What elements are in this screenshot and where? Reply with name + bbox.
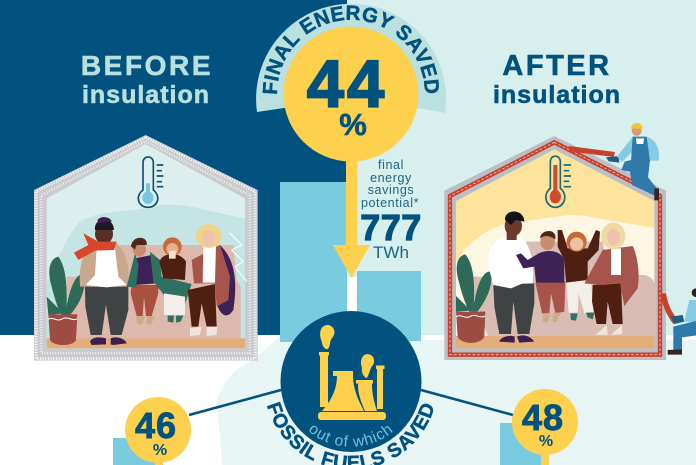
icon: thermometer warm bbox=[546, 156, 571, 207]
plant in pot bbox=[47, 257, 85, 345]
woman with a shawl bbox=[188, 224, 247, 336]
sofa bbox=[67, 245, 241, 338]
arrow from final energy saved to fossil fuels bbox=[333, 150, 370, 278]
caption: savings bbox=[368, 183, 414, 197]
badge: 48% bbox=[512, 389, 578, 465]
caption bbox=[361, 158, 419, 210]
icon: power plant bbox=[318, 325, 386, 420]
yellow circle bbox=[284, 26, 418, 162]
room backdrop bbox=[47, 205, 245, 338]
floor bbox=[456, 336, 654, 348]
heading: before insulation: BEFORE bbox=[81, 50, 213, 81]
badge: 46%: % bbox=[153, 442, 167, 459]
value 777: 777 bbox=[360, 207, 422, 248]
heading: after insulation bbox=[493, 50, 621, 109]
unit: TWh bbox=[373, 243, 409, 262]
smiling man bbox=[488, 211, 534, 343]
arc title: FINAL ENERGY SAVED bbox=[262, 5, 439, 94]
caption: potential* bbox=[361, 196, 419, 210]
percent sign: % bbox=[339, 107, 367, 142]
callout: final energy savings potential bbox=[360, 158, 422, 262]
heading: before insulation bbox=[81, 50, 213, 109]
worker at the wall bbox=[660, 288, 696, 355]
light blue bars bbox=[113, 182, 545, 465]
heading: before insulation: insulation bbox=[82, 81, 210, 109]
label: out of which: out of which bbox=[310, 426, 393, 447]
child raising arms bbox=[558, 230, 600, 321]
house shell with hatched insulation-free wall bbox=[34, 135, 258, 361]
house shell with insulated red wall bbox=[444, 136, 666, 360]
caption: final bbox=[378, 158, 404, 172]
badge: 46% bbox=[125, 397, 191, 465]
worker on the roof bbox=[569, 123, 659, 200]
connector lines bbox=[189, 390, 513, 415]
badge: final energy saved 44% bbox=[256, 4, 446, 162]
heading: after insulation: insulation bbox=[493, 81, 621, 109]
panel: warm house after insulation bbox=[444, 123, 696, 360]
badge: fossil fuels saved bbox=[266, 311, 434, 465]
child drinking from a mug bbox=[159, 237, 186, 323]
badge: 46%: 46 bbox=[135, 405, 177, 446]
warm room backdrop bbox=[456, 215, 654, 336]
caption: energy bbox=[370, 171, 412, 185]
person with hat and scarf bbox=[74, 217, 129, 345]
boy wrapped in a plaid blanket bbox=[127, 238, 192, 325]
panel: cold house before insulation bbox=[34, 135, 258, 361]
smiling woman bbox=[584, 223, 639, 335]
navy circle bbox=[280, 311, 422, 452]
arc banner bbox=[256, 4, 446, 113]
sofa bbox=[473, 242, 656, 336]
boy in a purple sweater bbox=[516, 231, 565, 323]
plant in pot bbox=[456, 254, 491, 343]
badge: 48%: 48 bbox=[522, 397, 564, 438]
value 44: 44 bbox=[307, 47, 387, 122]
badge: 48%: % bbox=[539, 433, 553, 450]
heading: after insulation: AFTER bbox=[502, 50, 612, 82]
icon: thermometer cold bbox=[138, 157, 163, 207]
floor bbox=[47, 338, 245, 348]
